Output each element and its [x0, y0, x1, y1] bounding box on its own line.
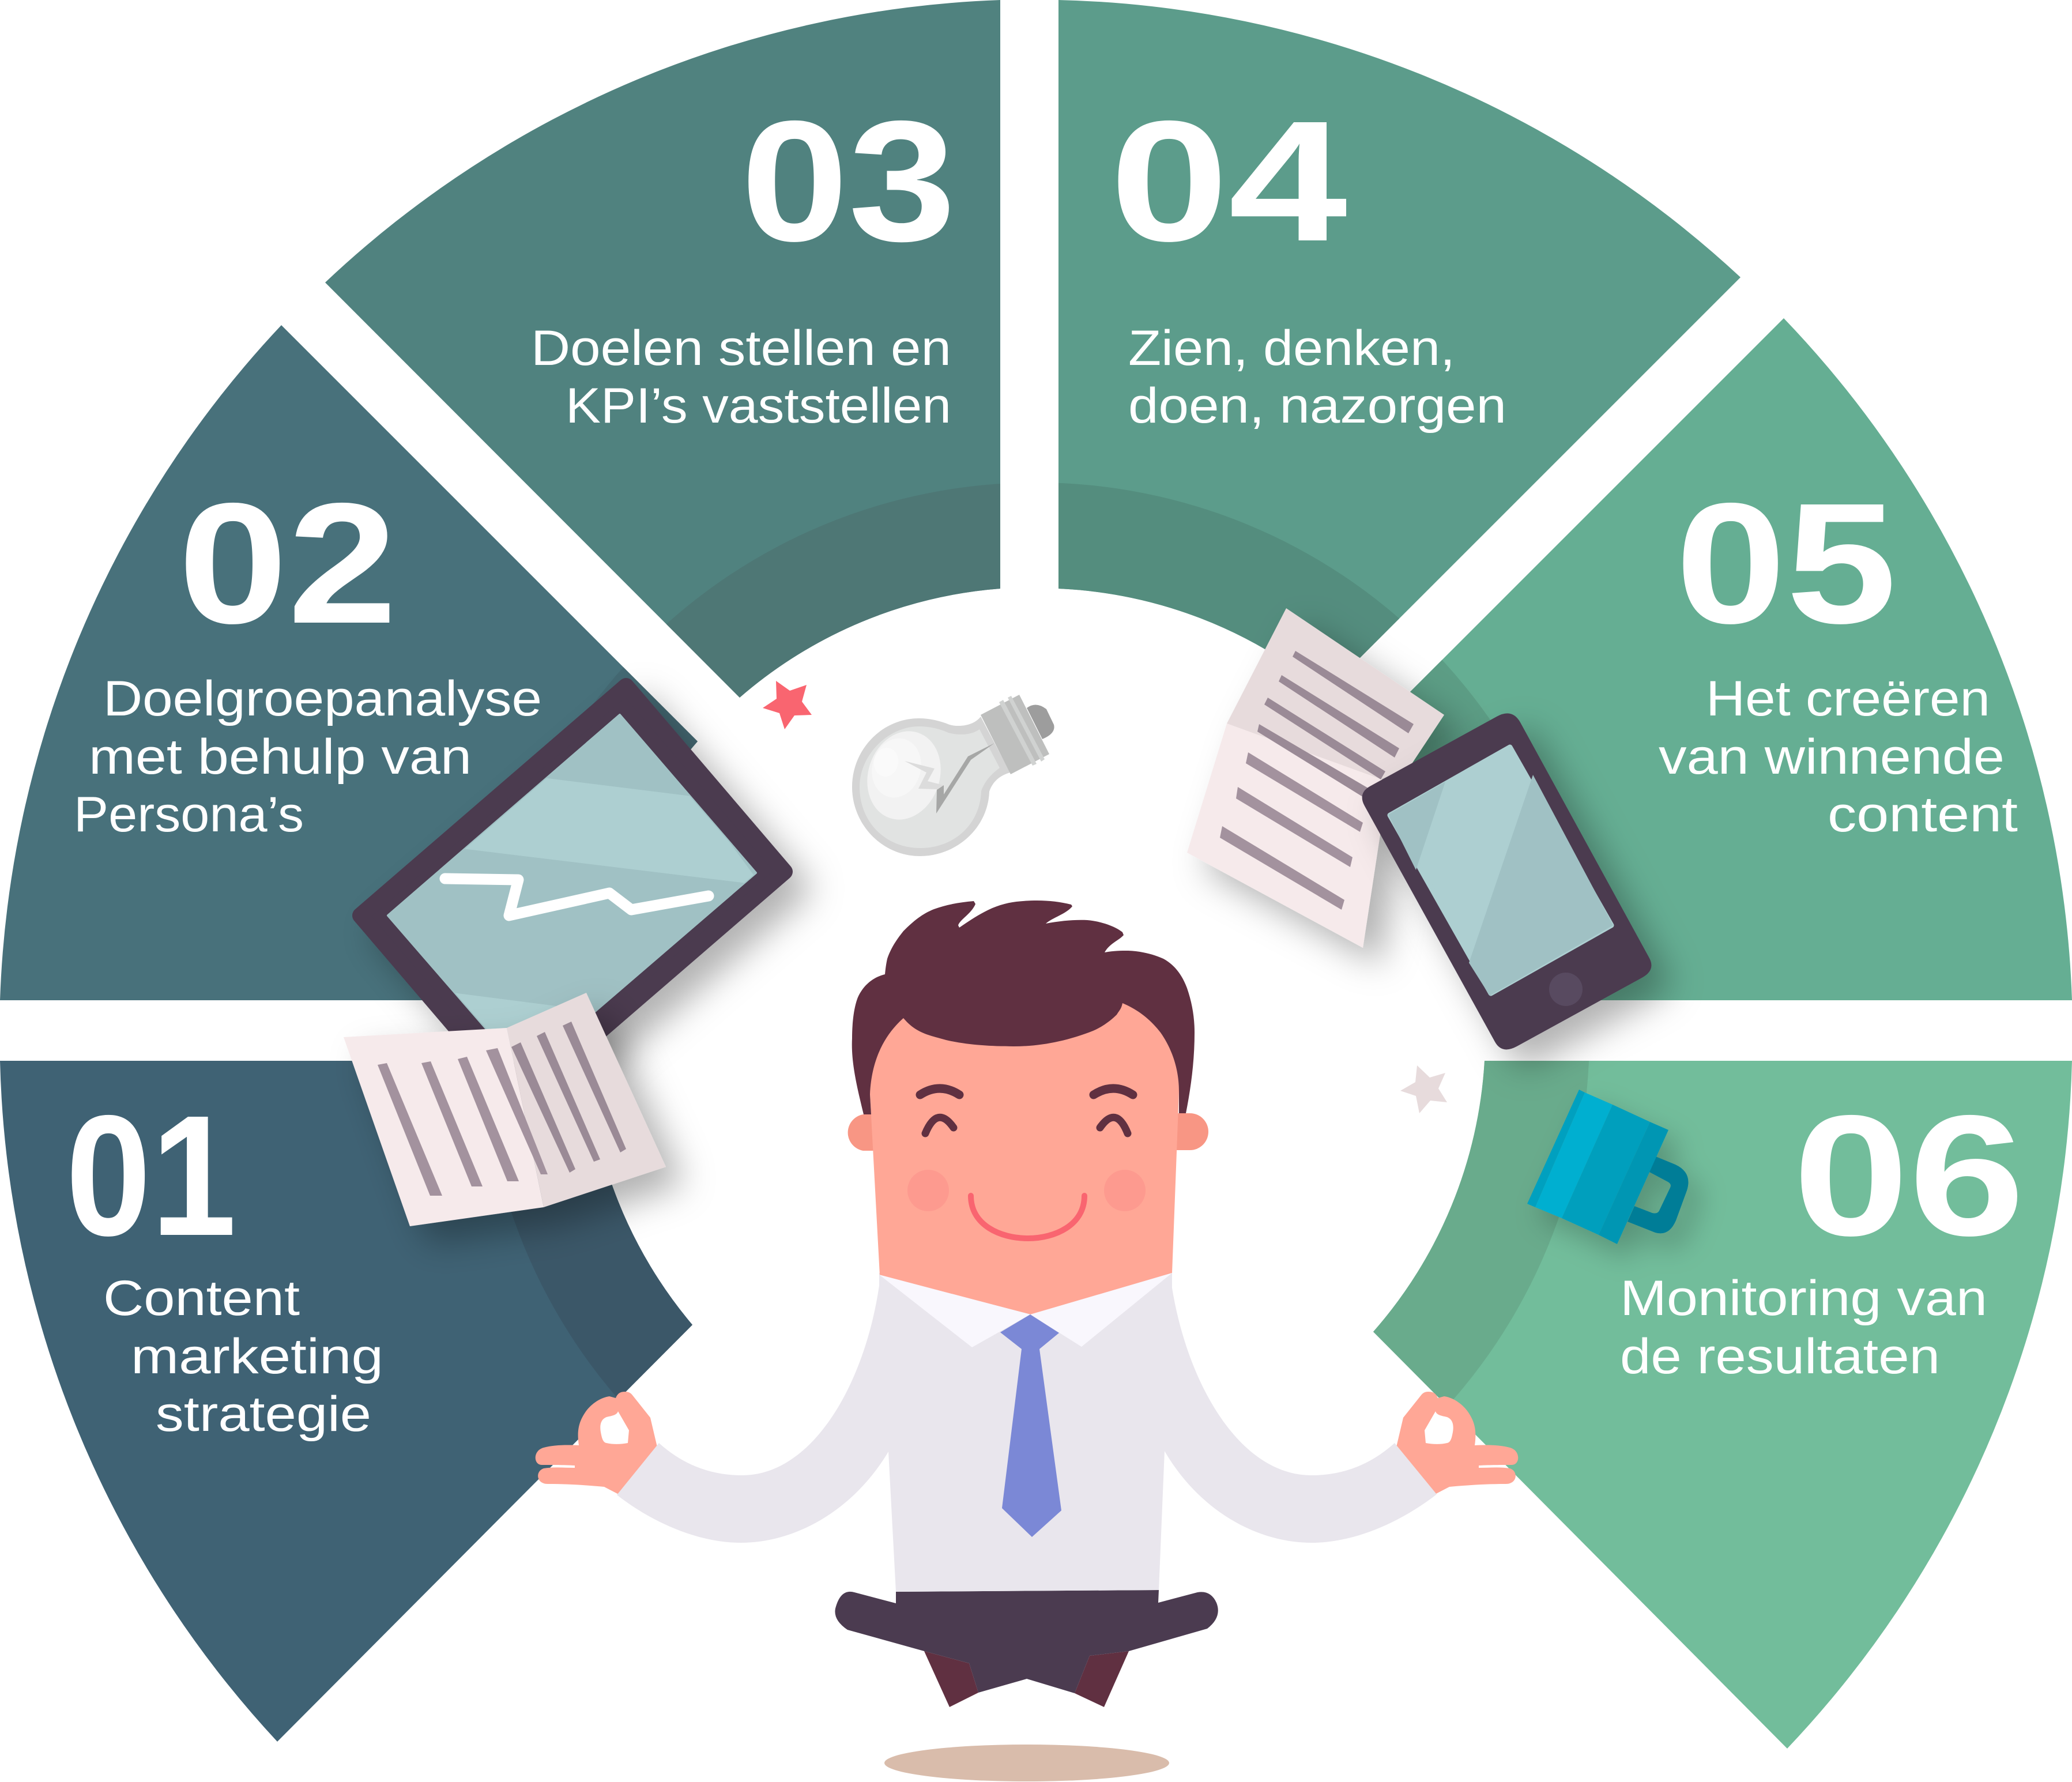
collar	[879, 1273, 1172, 1347]
text: segment 01	[103, 1271, 383, 1442]
text: segment 06: de resultaten	[1620, 1329, 1940, 1384]
text: segment 02: Doelgroepanalyse	[103, 671, 542, 726]
text: segment 05: Het creëren	[1706, 671, 1990, 726]
character: meditating businessman	[536, 901, 1518, 1707]
number 01: 01	[66, 1080, 236, 1272]
legs and trousers	[835, 1590, 1218, 1707]
text: segment 02: met behulp van	[89, 729, 472, 785]
number 02: 02	[178, 468, 397, 660]
text: segment 02: Persona’s	[74, 787, 304, 842]
ears	[848, 1113, 1208, 1151]
right hand	[1396, 1392, 1518, 1494]
icon: coffee mug	[1527, 1090, 1688, 1244]
text: segment 03: Doelen stellen en	[531, 321, 951, 376]
number 03: 03	[741, 85, 956, 277]
text: segment 05: content	[1828, 787, 2018, 842]
icon: red star	[763, 681, 812, 729]
text: segment 04: doen, nazorgen	[1128, 378, 1506, 434]
tie	[1000, 1314, 1061, 1537]
left hand	[536, 1392, 657, 1494]
panel: segment 06	[1373, 1061, 2072, 1749]
panel: segment 02	[0, 325, 698, 1000]
number 04: 04	[1110, 85, 1348, 277]
face	[870, 969, 1179, 1314]
eyes and brows	[920, 1088, 1133, 1133]
text: segment 04	[1128, 321, 1506, 434]
text: segment 03	[531, 321, 951, 434]
floor shadow	[884, 1745, 1169, 1781]
text: segment 01: strategie	[156, 1387, 371, 1442]
panel: segment 04	[1058, 0, 1741, 692]
icon: folded paper left	[344, 993, 666, 1226]
text: segment 01: Content	[103, 1271, 300, 1326]
cheeks	[907, 1170, 1146, 1211]
text: segment 06	[1620, 1271, 1987, 1384]
text: segment 02	[74, 671, 542, 842]
icon: light bulb	[852, 695, 1054, 856]
icon: pale star	[1400, 1065, 1447, 1113]
text: segment 06: Monitoring van	[1620, 1271, 1987, 1326]
number 06: 06	[1793, 1080, 2025, 1272]
panel: segment 03	[325, 0, 1000, 698]
number 05: 05	[1675, 468, 1897, 660]
panel: segment 05	[1369, 318, 2072, 1000]
icon: folded paper right	[1187, 608, 1444, 948]
text: segment 04: Zien, denken,	[1128, 321, 1455, 376]
text: segment 01: marketing	[131, 1329, 383, 1384]
text: segment 03: KPI’s vaststellen	[566, 378, 951, 434]
text: segment 05: van winnende	[1659, 729, 2005, 785]
shirt with arms	[617, 1272, 1437, 1592]
panel: segment 01	[0, 1061, 692, 1742]
hair	[852, 901, 1195, 1114]
mouth	[971, 1196, 1084, 1238]
icon: tablet	[360, 686, 785, 1101]
icon: smartphone	[1362, 713, 1651, 1049]
text: segment 05	[1659, 671, 2018, 842]
